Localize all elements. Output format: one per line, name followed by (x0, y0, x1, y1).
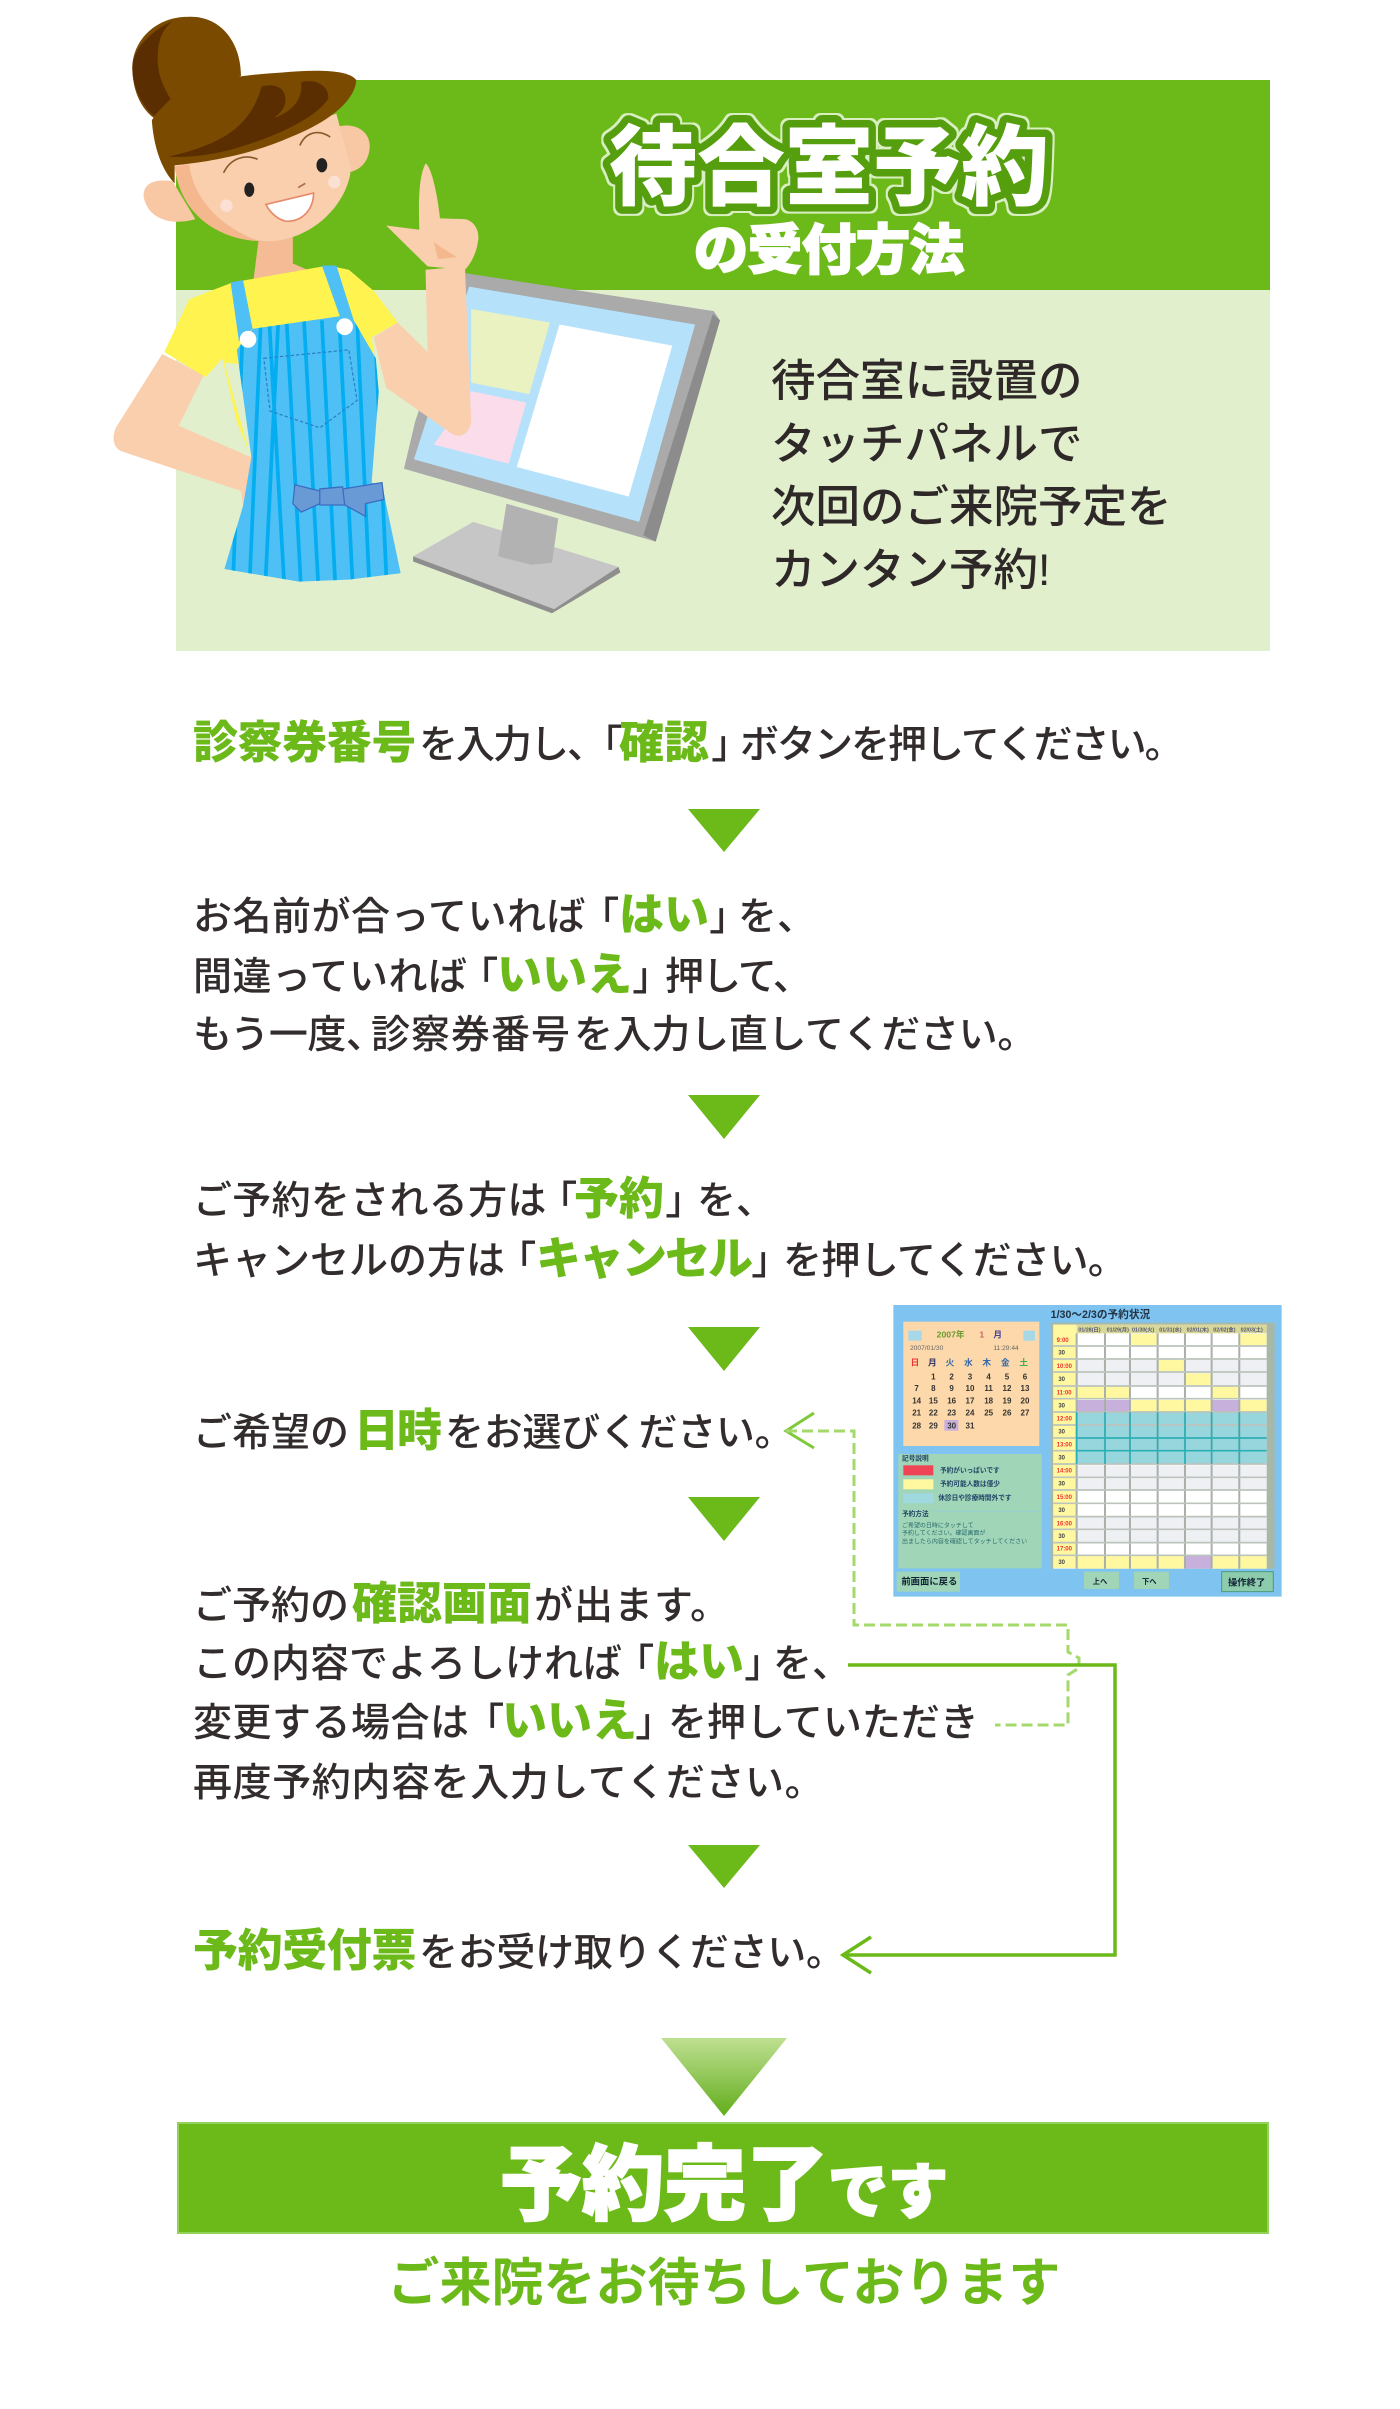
step 3 text: キャンセル (536, 1233, 752, 1284)
screenshot: reservation screen (893, 1305, 1282, 1597)
closing message: ご来院をお待ちしております (388, 2255, 1060, 2313)
calendar panel: 月 (928, 1358, 937, 1368)
step 5 text: 変更する場合は (193, 1702, 470, 1745)
step 2 text: はい (619, 889, 709, 940)
legend panel: 休診日や診療時間外です (938, 1493, 1012, 1502)
subheading: の受付方法: の受付方法 (694, 221, 964, 281)
step 2 text: 押して、 (665, 956, 810, 999)
calendar panel: 3 (968, 1372, 973, 1381)
calendar panel: 21 (912, 1409, 922, 1418)
step 2 text: 「 (478, 956, 498, 999)
step 3 text (193, 1173, 1126, 1284)
arrow: step 4 to 5 (688, 1497, 760, 1541)
arrow: large gradient triangle (661, 2038, 787, 2116)
calendar panel: 7 (914, 1384, 919, 1393)
appointment grid: 9:00 (1057, 1338, 1069, 1344)
step 2 text: 間違っていれば (193, 956, 468, 999)
calendar panel: 25 (984, 1409, 994, 1418)
calendar panel: 16 (947, 1396, 957, 1405)
heading: 待合室予約: 待合室予約 (609, 118, 1049, 217)
appointment grid: 11:00 (1057, 1390, 1072, 1396)
step 2 text: を入力し直してください。 (574, 1014, 1036, 1057)
appointment grid: 02/03(土) (1241, 1325, 1263, 1333)
appointment grid: 30 (1058, 1429, 1066, 1435)
calendar panel: 27 (1021, 1409, 1030, 1418)
step 4 text: 日時 (354, 1405, 441, 1456)
arrow: step 2 to 3 (688, 1095, 760, 1139)
legend panel: ご希望の日時にタッチして (902, 1521, 974, 1529)
appointment grid: 30 (1058, 1481, 1066, 1487)
calendar panel: 水 (964, 1357, 973, 1368)
calendar panel: 金 (1001, 1357, 1010, 1368)
step 6 text: 予約受付票 (193, 1925, 416, 1976)
step 3 text: 「 (516, 1240, 536, 1283)
calendar panel: 月 (993, 1329, 1002, 1339)
step 2 text: 」 (633, 956, 653, 999)
step 5 text: はい (654, 1636, 744, 1687)
step 6 text: をお受け取りください。 (419, 1932, 845, 1975)
arrow: step 5 to 6 (688, 1845, 760, 1888)
calendar panel: 17 (966, 1396, 975, 1405)
step 3 text: ご予約をされる方は (193, 1180, 547, 1223)
step 5 text: ご予約の (193, 1585, 349, 1628)
calendar panel: 29 (929, 1421, 938, 1430)
calendar panel: 23 (947, 1409, 957, 1418)
step 3 text: 「 (557, 1180, 577, 1223)
step 1 text: 「 (602, 724, 622, 767)
buttons: 操作終了 (1228, 1576, 1265, 1587)
text block: intro: タッチパネルで (771, 420, 1083, 469)
calendar panel: 14 (912, 1396, 922, 1405)
appointment grid: 01/28(日) (1078, 1326, 1101, 1333)
step 2 text: もう一度、 (193, 1014, 384, 1057)
appointment grid: 13:00 (1057, 1443, 1073, 1449)
panel: completion banner (178, 2123, 1268, 2233)
step 3 text: キャンセルの方は (193, 1240, 505, 1283)
illustration: monitor (404, 273, 720, 613)
calendar panel: 11 (984, 1384, 993, 1393)
panel: completion banner: 予約完了です (500, 2140, 948, 2231)
legend panel: 予約可能人数は僅少 (940, 1479, 1000, 1488)
step 1 text: 」 (712, 724, 732, 767)
step 3 text: を、 (697, 1180, 775, 1223)
legend panel: 予約してください。確認画面が (902, 1529, 985, 1537)
calendar panel: 11:29:44 (993, 1345, 1019, 1352)
step 5 text: 」 (636, 1702, 656, 1745)
appointment grid: 02/02(金) (1213, 1325, 1236, 1333)
calendar panel: 2007年 (937, 1328, 965, 1339)
appointment grid: 17:00 (1057, 1547, 1073, 1553)
calendar panel: 19 (1003, 1396, 1012, 1405)
appointment grid: 12:00 (1057, 1417, 1073, 1423)
step 2 text: お名前が合っていれば (193, 896, 586, 939)
step 5 text: が出ます。 (534, 1585, 730, 1628)
appointment grid: 01/30(火) (1132, 1327, 1154, 1333)
step 2 text (193, 889, 1036, 1057)
calendar panel: 22 (929, 1409, 938, 1418)
step 3 text: 予約 (574, 1173, 664, 1224)
appointment grid: 30 (1058, 1351, 1066, 1357)
calendar panel: 火 (946, 1358, 955, 1368)
appointment grid: 30 (1058, 1508, 1066, 1514)
buttons: 上へ (1093, 1577, 1108, 1586)
appointment grid: 15:00 (1057, 1495, 1073, 1501)
calendar panel: 26 (1003, 1409, 1012, 1418)
step 5 text: を、 (773, 1643, 851, 1686)
step 5 text: 」 (745, 1643, 765, 1686)
appointment grid: 30 (1058, 1560, 1066, 1566)
step 5 text (193, 1578, 979, 1805)
appointment grid: 30 (1058, 1377, 1066, 1383)
arrow: dashed back to date selection (786, 1413, 1079, 1725)
step 1 text: 確認 (619, 717, 709, 768)
calendar panel: 6 (1023, 1372, 1028, 1381)
step 1 text: ボタンを押してください。 (740, 724, 1182, 767)
calendar panel: 土 (1019, 1357, 1028, 1368)
arrow: step 3 to 4 (688, 1327, 760, 1371)
calendar panel: 4 (986, 1372, 991, 1381)
calendar panel: 2007/01/30 (910, 1345, 944, 1352)
appointment grid (1051, 1323, 1275, 1569)
step 3 text: 」 (752, 1240, 772, 1283)
legend panel: 予約方法 (902, 1509, 929, 1518)
step 5 text: 「 (484, 1702, 504, 1745)
calendar panel: 24 (966, 1409, 975, 1418)
step 5 text: 確認画面 (352, 1578, 532, 1629)
arrow: step 1 to 2 (688, 809, 760, 852)
appointment grid: 14:00 (1057, 1469, 1073, 1475)
step 3 text: を押してください。 (783, 1240, 1126, 1283)
step 4 text: ご希望の (193, 1412, 349, 1455)
text block: intro: カンタン予約! (771, 546, 1050, 595)
step 1 text: 診察券番号 (193, 717, 416, 768)
buttons: 下へ (1142, 1577, 1157, 1586)
step 5 text: を押していただき (668, 1702, 979, 1745)
calendar panel: 18 (984, 1396, 994, 1405)
legend panel: 出ましたら内容を確認してタッチしてください (902, 1537, 1027, 1545)
calendar panel: 10 (966, 1384, 975, 1393)
step 2 text: 診察券番号 (371, 1014, 571, 1057)
text block: intro (771, 357, 1172, 595)
illustration: receptionist woman (114, 17, 478, 590)
step 2 text: を、 (738, 896, 816, 939)
text block: intro: 次回のご来院予定を (771, 483, 1172, 532)
step 5 text: 再度予約内容を入力してください。 (193, 1762, 824, 1805)
legend panel: 予約がいっぱいです (940, 1465, 1000, 1474)
text block: intro: 待合室に設置の (771, 357, 1083, 406)
calendar panel: 5 (1005, 1372, 1010, 1381)
panel: header background (176, 80, 1270, 651)
calendar panel: 9 (949, 1384, 954, 1393)
step 5 text: 「 (634, 1643, 654, 1686)
buttons: 前画面に戻る (901, 1576, 957, 1587)
calendar panel: 28 (912, 1421, 922, 1430)
calendar panel: 8 (931, 1384, 936, 1393)
screen title: 1/30～2/3の予約状況 (1051, 1308, 1150, 1321)
step 3 text: 」 (666, 1180, 686, 1223)
step 2 text: 「 (599, 896, 619, 939)
appointment grid: 01/31(水) (1159, 1325, 1182, 1333)
appointment grid: 16:00 (1057, 1521, 1073, 1527)
calendar panel: 1 (979, 1329, 984, 1339)
calendar panel: 13 (1021, 1384, 1030, 1393)
calendar panel: 木 (982, 1357, 991, 1368)
calendar panel: 1 (931, 1372, 936, 1381)
step 2 text: 」 (710, 896, 730, 939)
appointment grid: 30 (1058, 1403, 1066, 1409)
calendar panel: 20 (1021, 1396, 1030, 1405)
buttons (897, 1572, 1273, 1592)
calendar panel (903, 1322, 1039, 1446)
step 1 text: を入力し、 (419, 724, 604, 767)
step 5 text: いいえ (502, 1695, 637, 1746)
appointment grid: 30 (1058, 1534, 1066, 1540)
step 2 text: いいえ (497, 949, 632, 1000)
step 4 text: をお選びください。 (445, 1412, 793, 1455)
appointment grid: 30 (1058, 1455, 1066, 1461)
calendar panel: 日 (911, 1358, 919, 1368)
calendar panel: 2 (949, 1372, 954, 1381)
legend panel: 記号説明 (902, 1454, 929, 1463)
legend panel (898, 1454, 1042, 1568)
calendar panel: 30 (947, 1421, 957, 1430)
calendar panel: 15 (929, 1396, 938, 1405)
appointment grid: 02/01(木) (1187, 1325, 1209, 1333)
appointment grid: 10:00 (1057, 1364, 1073, 1370)
step 5 text: この内容でよろしければ (193, 1643, 622, 1686)
calendar panel: 12 (1003, 1384, 1012, 1393)
appointment grid: 01/29(月) (1107, 1326, 1129, 1333)
arrow: solid to receipt (842, 1665, 1115, 1973)
calendar panel: 31 (966, 1421, 975, 1430)
